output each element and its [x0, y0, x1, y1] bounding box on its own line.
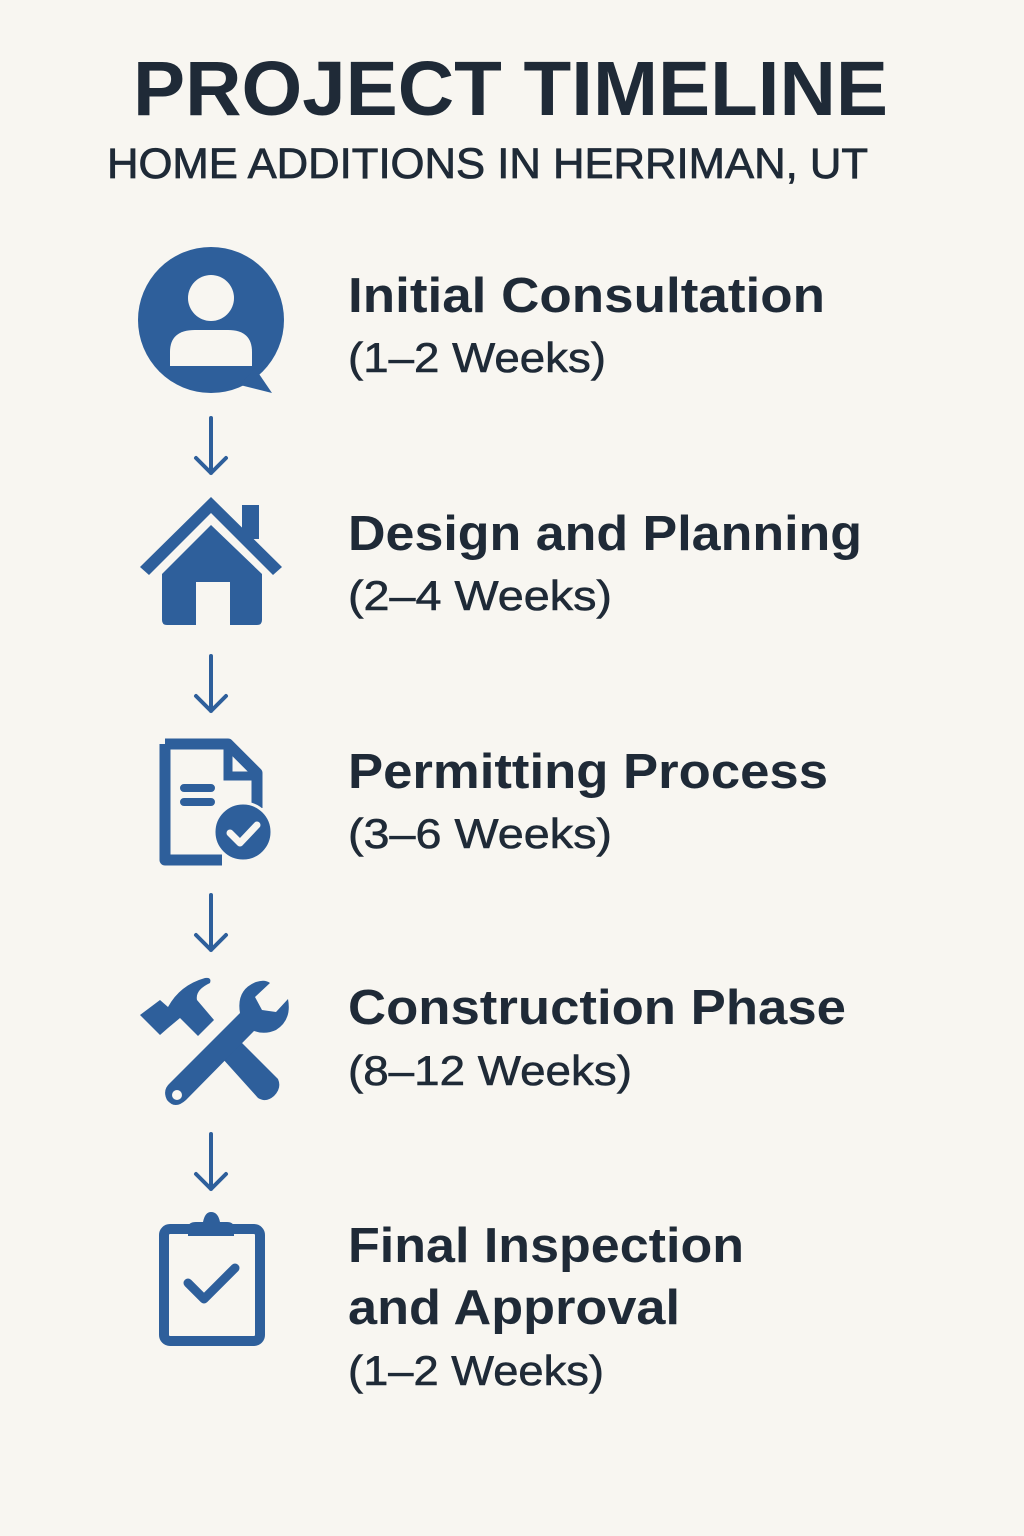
arrow 2: [196, 656, 226, 711]
step 2 text: (2–4 Weeks): [348, 572, 612, 619]
step 1 text: [348, 269, 825, 381]
step 3 text: Permitting Process: [348, 745, 828, 799]
step 4 text: Construction Phase: [348, 981, 846, 1035]
step 1 text: (1–2 Weeks): [348, 334, 606, 381]
step 5 text: and Approval: [348, 1281, 680, 1335]
step 4 text: [348, 981, 846, 1094]
step 2 text: Design and Planning: [348, 507, 862, 561]
step 4 text: (8–12 Weeks): [348, 1047, 632, 1094]
icon: clipboard: [164, 1212, 260, 1341]
arrow 4: [196, 1134, 226, 1189]
icon: permit document: [165, 744, 272, 861]
step 2 text: [348, 507, 862, 619]
step 3 text: (3–6 Weeks): [348, 810, 612, 857]
icon: tools: [140, 978, 289, 1105]
title: PROJECT TIMELINE: [133, 46, 888, 132]
icon: consultation: [138, 247, 284, 393]
arrow 1: [196, 418, 226, 473]
step 5 text: Final Inspection: [348, 1219, 744, 1273]
step 3 text: [348, 745, 828, 857]
icon: house: [140, 497, 282, 625]
step 5 text: (1–2 Weeks): [348, 1347, 604, 1394]
step 5 text: [348, 1219, 744, 1394]
arrow 3: [196, 895, 226, 950]
step 1 text: Initial Consultation: [348, 269, 825, 323]
subtitle: HOME ADDITIONS IN HERRIMAN, UT: [107, 140, 868, 188]
